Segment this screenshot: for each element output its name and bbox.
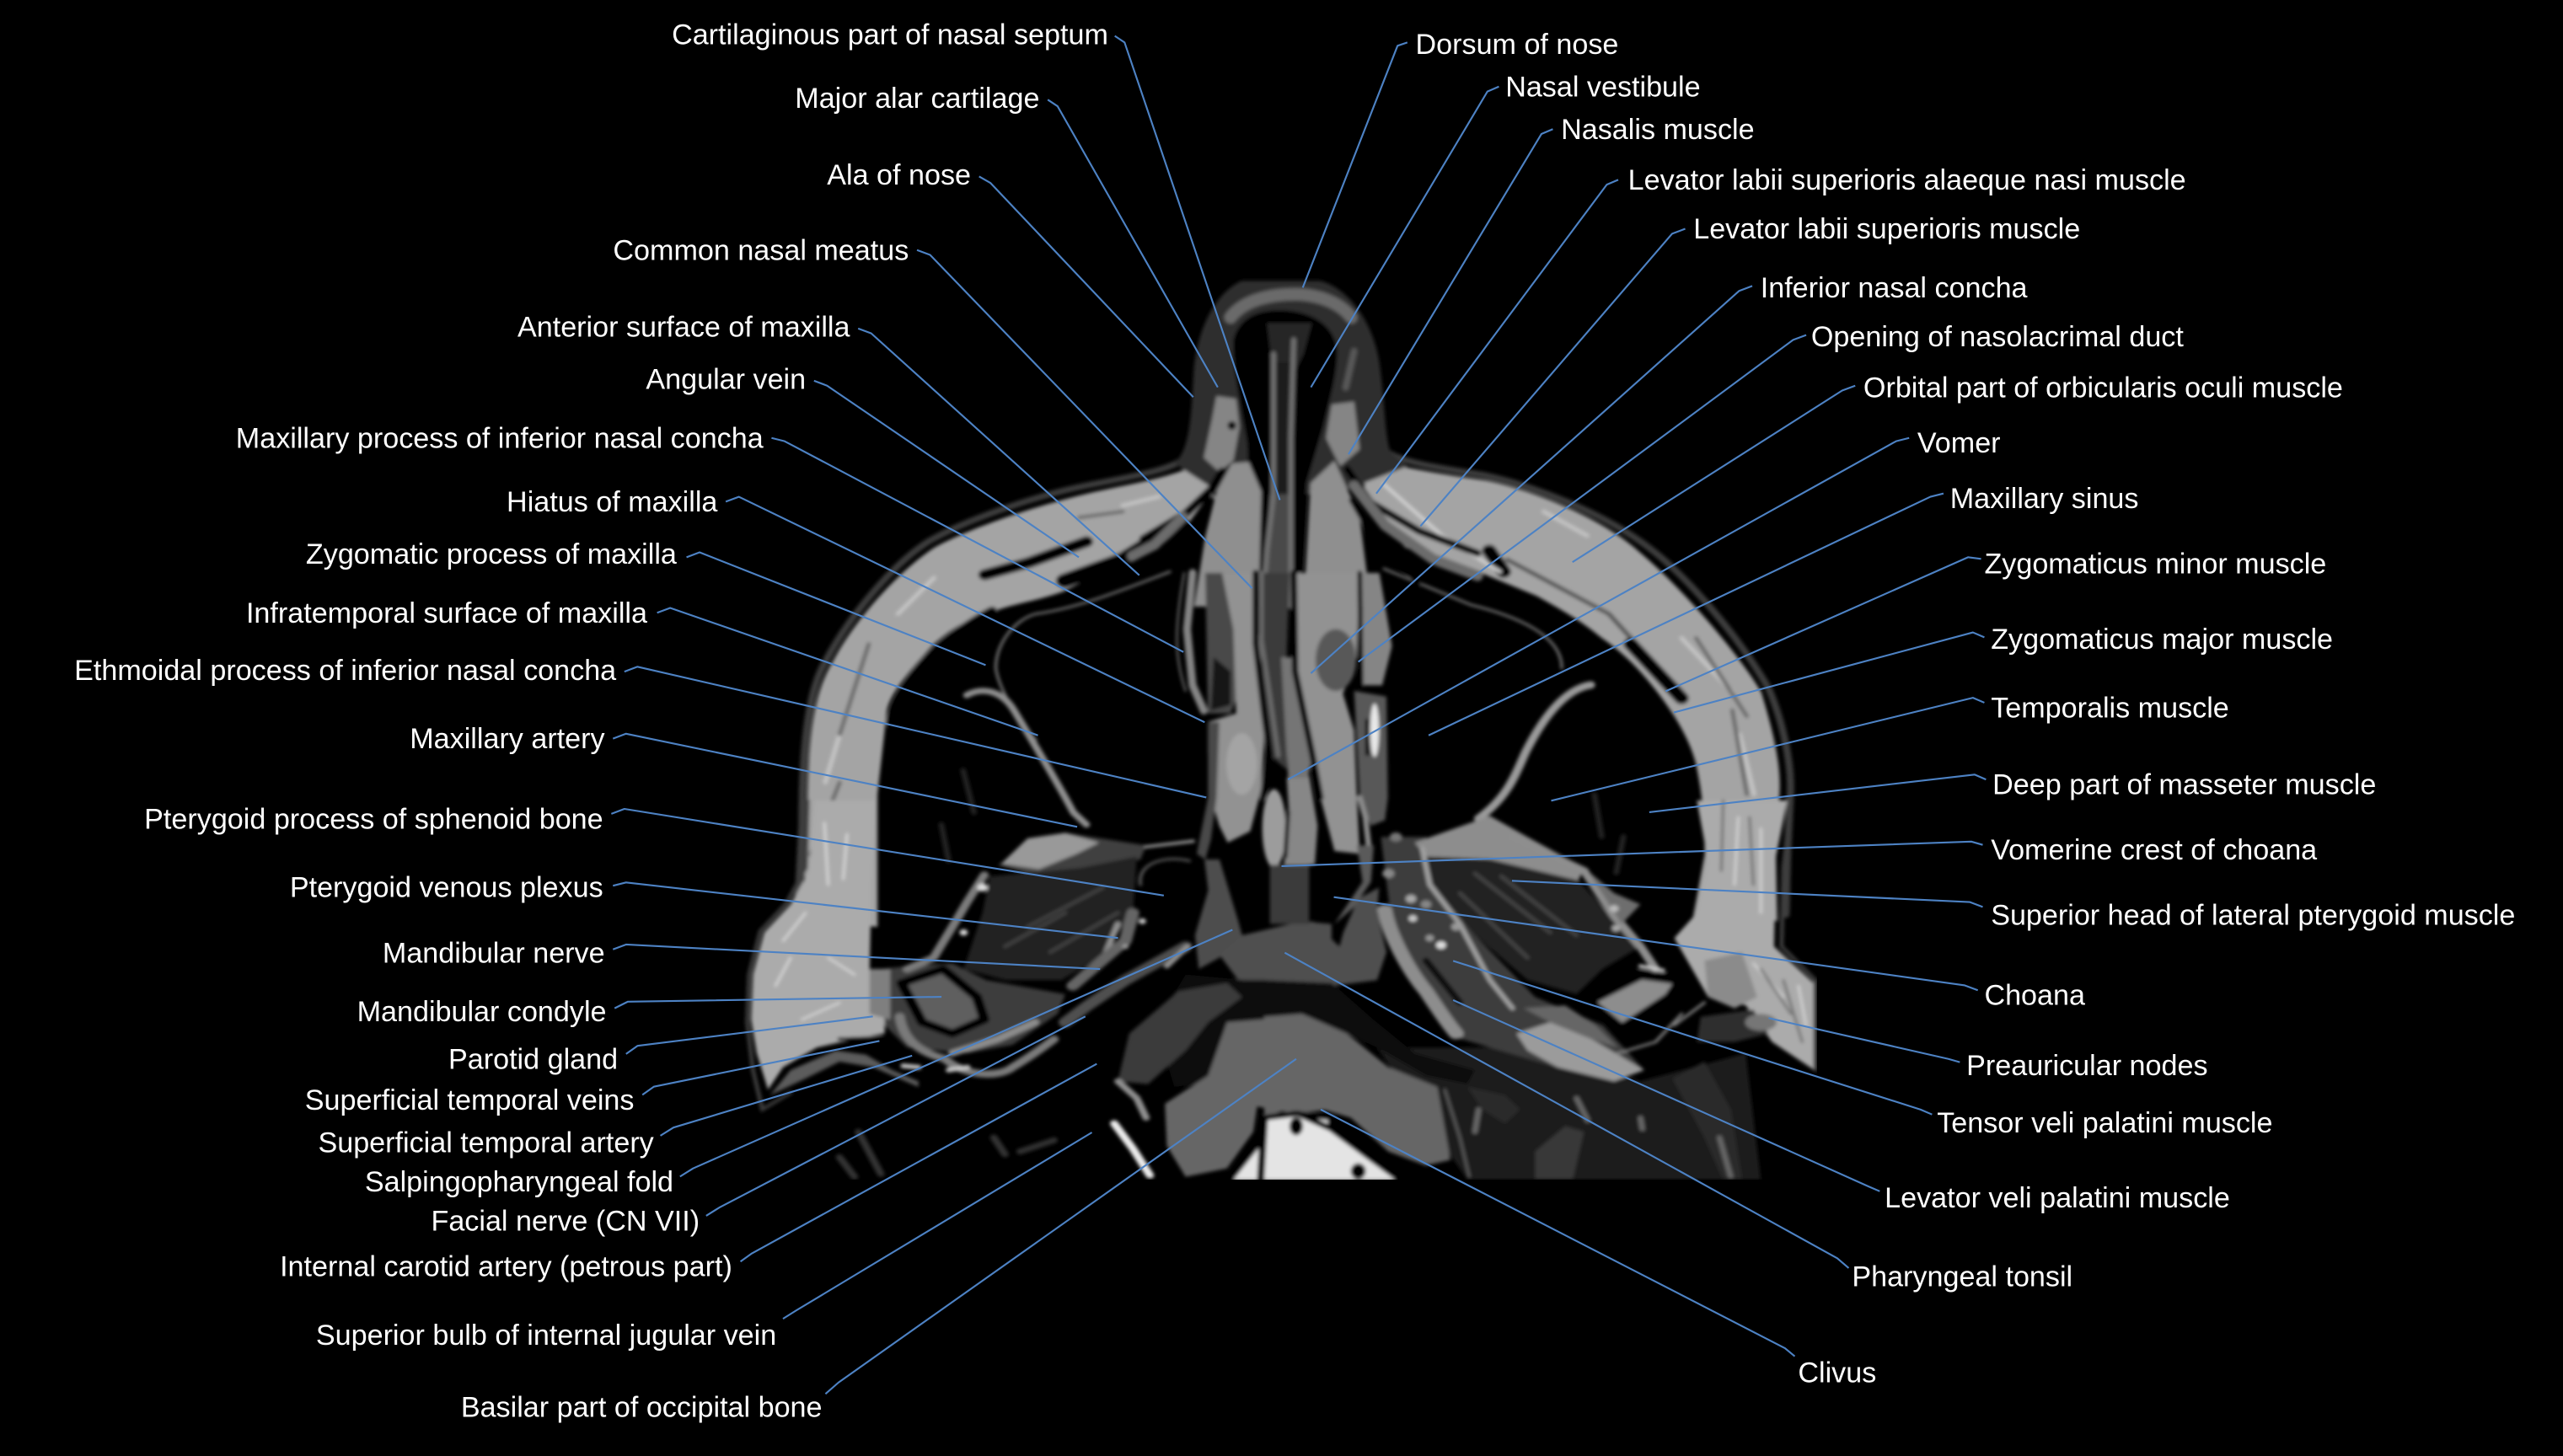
label: Ethmoidal process of inferior nasal concha [74, 655, 1206, 797]
label: Maxillary process of inferior nasal concha: Maxillary process of inferior nasal concha [236, 422, 764, 454]
label: Deep part of masseter muscle [1649, 769, 2376, 812]
label: Opening of nasolacrimal duct [1359, 321, 2184, 661]
label: Ala of nose: Ala of nose [827, 159, 971, 191]
label: Superior head of lateral pterygoid muscle: Superior head of lateral pterygoid muscle [1991, 900, 2515, 932]
label: Superficial temporal veins: Superficial temporal veins [305, 1084, 634, 1116]
label: Superior bulb of internal jugular vein [316, 1132, 1092, 1352]
label: Choana: Choana [1984, 980, 2085, 1012]
label: Mandibular nerve: Mandibular nerve [383, 937, 605, 969]
label: Nasal vestibule: Nasal vestibule [1505, 71, 1701, 103]
MRI axial scan [748, 281, 1815, 1182]
label: Levator veli palatini muscle: Levator veli palatini muscle [1885, 1182, 2230, 1214]
label: Parotid gland [448, 1016, 873, 1075]
label: Levator veli palatini muscle [1453, 1000, 2230, 1214]
label: Hiatus of maxilla [507, 486, 1204, 722]
label: Maxillary sinus [1429, 483, 2138, 736]
label: Zygomaticus minor muscle: Zygomaticus minor muscle [1984, 549, 2326, 581]
label: Zygomatic process of maxilla [306, 538, 985, 665]
label: Vomerine crest of choana [1281, 834, 2317, 866]
nose: dorsum, vestibule, upper septum [1132, 281, 1477, 607]
label: Superficial temporal veins [305, 1041, 879, 1116]
label: Superior bulb of internal jugular vein: Superior bulb of internal jugular vein [316, 1320, 776, 1352]
label: Angular vein: Angular vein [646, 364, 806, 396]
facial soft tissue arch [797, 452, 1790, 927]
label: Vomerine crest of choana: Vomerine crest of choana [1991, 834, 2317, 866]
maxillary sinus walls [995, 572, 1170, 741]
label: Zygomaticus major muscle [1674, 624, 2333, 713]
label: Choana [1334, 897, 2085, 1012]
lower left: parotid, condyle, pterygoid [748, 800, 1332, 1182]
label: Opening of nasolacrimal duct: Opening of nasolacrimal duct [1811, 321, 2184, 353]
nasal cavity: conchae, septum, meatus [1177, 573, 1392, 924]
label: Major alar cartilage: Major alar cartilage [795, 83, 1039, 115]
label: Zygomaticus major muscle: Zygomaticus major muscle [1991, 624, 2333, 656]
label: Vomer: Vomer [1917, 427, 2001, 459]
label: Levator labii superioris alaeque nasi muscle [1376, 164, 2186, 494]
label: Temporalis muscle: Temporalis muscle [1991, 692, 2229, 724]
label: Vomer [1288, 427, 2001, 779]
label: Cartilaginous part of nasal septum: Cartilaginous part of nasal septum [672, 19, 1108, 51]
label: Superficial temporal artery: Superficial temporal artery [318, 1127, 654, 1159]
label: Internal carotid artery (petrous part): Internal carotid artery (petrous part) [280, 1251, 732, 1283]
label: Salpingopharyngeal fold: Salpingopharyngeal fold [365, 1166, 673, 1198]
label: Common nasal meatus: Common nasal meatus [613, 234, 909, 266]
label: Inferior nasal concha: Inferior nasal concha [1761, 272, 2028, 304]
label: Anterior surface of maxilla [517, 312, 1139, 575]
label: Preauricular nodes [1768, 1018, 2208, 1082]
label: Ala of nose [827, 159, 1193, 397]
label: Dorsum of nose [1303, 29, 1618, 287]
label: Hiatus of maxilla: Hiatus of maxilla [507, 486, 717, 518]
label: Common nasal meatus [613, 234, 1252, 588]
label: Pterygoid process of sphenoid bone: Pterygoid process of sphenoid bone [144, 803, 603, 835]
label: Nasal vestibule [1311, 71, 1701, 388]
label: Basilar part of occipital bone [461, 1059, 1296, 1423]
label: Facial nerve (CN VII) [431, 1016, 1086, 1237]
label: Mandibular condyle [357, 996, 941, 1028]
label: Levator labii superioris muscle [1420, 213, 2080, 526]
label: Angular vein [646, 364, 1079, 557]
label: Clivus [1321, 1110, 1876, 1389]
label: Maxillary artery [410, 723, 1077, 827]
label: Pterygoid venous plexus: Pterygoid venous plexus [290, 872, 603, 904]
label: Maxillary sinus: Maxillary sinus [1950, 483, 2138, 515]
label: Cartilaginous part of nasal septum [672, 19, 1280, 500]
label: Dorsum of nose: Dorsum of nose [1416, 29, 1618, 61]
label: Nasalis muscle: Nasalis muscle [1561, 114, 1755, 146]
label: Mandibular condyle: Mandibular condyle [357, 996, 607, 1028]
label: Orbital part of orbicularis oculi muscle [1573, 372, 2343, 562]
label: Clivus: Clivus [1798, 1357, 1876, 1389]
label: Ethmoidal process of inferior nasal concha: Ethmoidal process of inferior nasal concha [74, 655, 616, 687]
label: Pterygoid process of sphenoid bone [144, 803, 1164, 896]
label: Pterygoid venous plexus [290, 872, 1118, 938]
label: Deep part of masseter muscle: Deep part of masseter muscle [1992, 769, 2376, 801]
label: Maxillary process of inferior nasal concha [236, 422, 1183, 652]
label: Pharyngeal tonsil: Pharyngeal tonsil [1852, 1261, 2072, 1293]
lower right: lateral pterygoid, condyle, parotid, clivus [1261, 800, 1815, 1182]
label: Tensor veli palatini muscle [1453, 961, 2273, 1139]
label: Zygomatic process of maxilla: Zygomatic process of maxilla [306, 538, 677, 570]
label: Levator labii superioris alaeque nasi muscle: Levator labii superioris alaeque nasi muscle [1628, 164, 2186, 196]
label: Anterior surface of maxilla: Anterior surface of maxilla [517, 312, 850, 344]
label: Parotid gland: Parotid gland [448, 1043, 618, 1075]
label: Superior head of lateral pterygoid muscle [1512, 881, 2515, 932]
label: Major alar cartilage [795, 83, 1218, 388]
label: Facial nerve (CN VII): Facial nerve (CN VII) [431, 1205, 700, 1237]
label: Salpingopharyngeal fold [365, 930, 1232, 1198]
label: Infratemporal surface of maxilla: Infratemporal surface of maxilla [246, 597, 647, 629]
label: Zygomaticus minor muscle [1665, 549, 2326, 691]
label: Nasalis muscle [1349, 114, 1755, 454]
label: Mandibular nerve [383, 937, 1100, 969]
label: Temporalis muscle [1552, 692, 2229, 800]
label: Inferior nasal concha [1311, 272, 2028, 673]
label: Maxillary artery: Maxillary artery [410, 723, 605, 755]
label: Internal carotid artery (petrous part) [280, 1064, 1097, 1283]
label: Levator labii superioris muscle: Levator labii superioris muscle [1693, 213, 2080, 245]
label: Orbital part of orbicularis oculi muscle: Orbital part of orbicularis oculi muscle [1863, 372, 2343, 404]
label: Pharyngeal tonsil [1284, 953, 2072, 1293]
label: Infratemporal surface of maxilla [246, 597, 1038, 736]
label: Basilar part of occipital bone: Basilar part of occipital bone [461, 1391, 823, 1423]
label: Tensor veli palatini muscle: Tensor veli palatini muscle [1937, 1107, 2273, 1139]
label: Preauricular nodes: Preauricular nodes [1966, 1050, 2208, 1082]
label: Superficial temporal artery [318, 1056, 912, 1159]
